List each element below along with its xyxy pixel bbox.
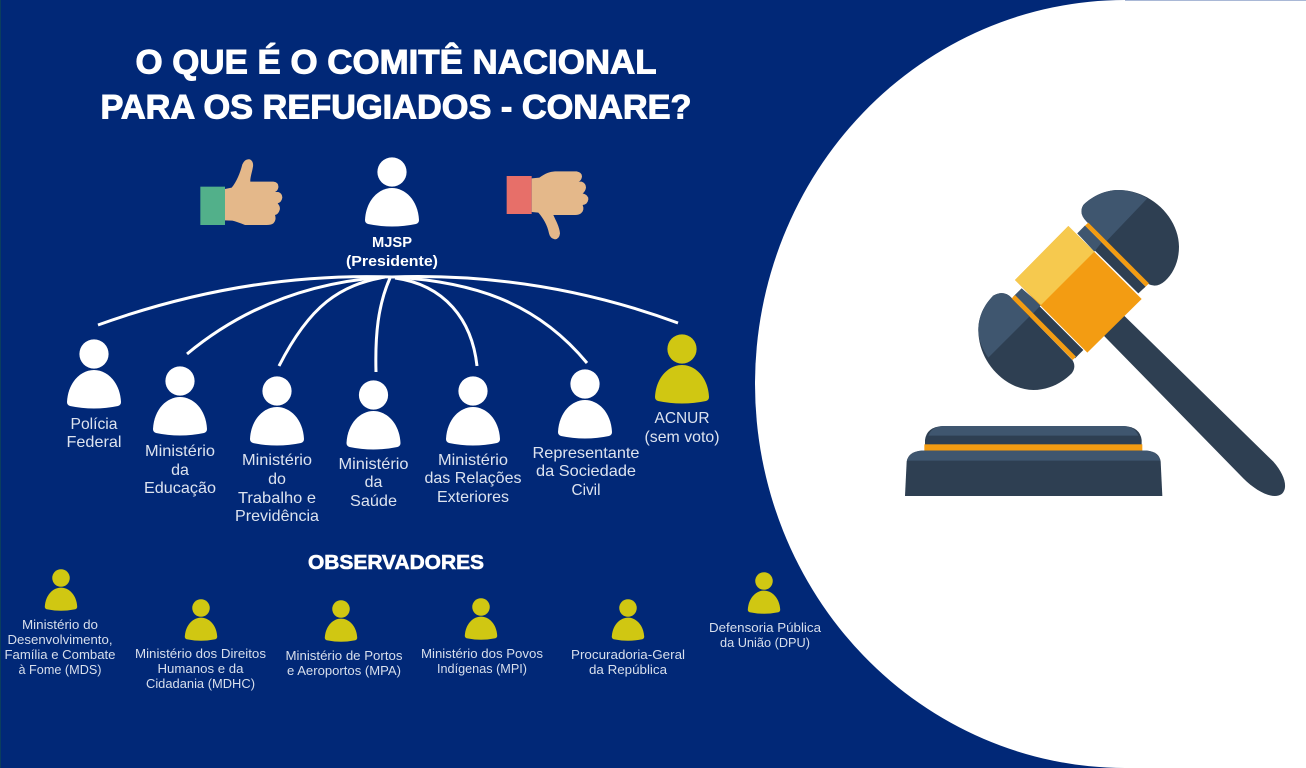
- member: Polícia Federal: Federal: [66, 434, 122, 451]
- white curved panel: [755, 0, 1306, 768]
- connector lines: [98, 277, 678, 372]
- title: [100, 44, 692, 126]
- member: Ministério da Educação: [144, 366, 216, 497]
- heading: observadores: OBSERVADORES: [308, 552, 484, 574]
- observer: MPI: [421, 598, 543, 676]
- member: Ministério do Trabalho e Previdência: [235, 376, 319, 525]
- member: Representante da Sociedade Civil: da Sociedade: [536, 463, 636, 480]
- president: MJSP: MJSP: [372, 234, 412, 251]
- member: Ministério do Trabalho e Previdência: Trabalho e: [238, 490, 316, 507]
- president: MJSP: (Presidente): [346, 253, 438, 270]
- member: Ministério da Saúde: da: [365, 474, 382, 491]
- observer: MDHC: Ministério dos Direitos: [135, 646, 267, 661]
- member: Ministério das Relações Exteriores: Exteriores: [437, 489, 509, 506]
- member: Representante da Sociedade Civil: Civil: [572, 482, 600, 499]
- observer: MDS: Família e Combate: [4, 647, 116, 662]
- observer: MPA: [286, 600, 403, 678]
- title: O QUE É O COMITÊ NACIONAL: [136, 44, 656, 82]
- icon: thumbs down: [507, 171, 588, 239]
- observer: MDS: [4, 569, 116, 677]
- member: Ministério da Educação: da: [171, 462, 189, 479]
- member: ACNUR: (sem voto): [644, 429, 720, 446]
- observer: MDHC: [135, 599, 267, 691]
- observer: MDHC: Cidadania (MDHC): [146, 676, 255, 691]
- observer: MDHC: Humanos e da: [158, 661, 244, 676]
- member: Polícia Federal: Polícia: [70, 416, 118, 433]
- observer: DPU: [709, 572, 822, 650]
- member: Ministério das Relações Exteriores: das Relações: [424, 470, 522, 487]
- icon: thumbs up: [200, 159, 282, 225]
- observer: MPA: e Aeroportos (MPA): [287, 663, 401, 678]
- observer: MDS: Ministério do: [22, 617, 98, 632]
- title: PARA OS REFUGIADOS - CONARE?: [100, 88, 692, 126]
- member: Ministério da Saúde: [338, 380, 409, 510]
- member: Representante da Sociedade Civil: Representante: [532, 445, 640, 462]
- observer: MDS: à Fome (MDS): [18, 662, 102, 677]
- observer: PGR: [571, 599, 685, 677]
- observer: DPU: da União (DPU): [720, 635, 810, 650]
- president: MJSP: [346, 157, 438, 270]
- observer: MDS: Desenvolvimento,: [8, 632, 112, 647]
- observer: DPU: Defensoria Pública: [709, 620, 822, 635]
- member: Polícia Federal: [66, 339, 122, 451]
- observer: MPA: Ministério de Portos: [286, 648, 403, 663]
- member: Ministério da Educação: Educação: [144, 480, 216, 497]
- member: ACNUR: ACNUR: [654, 410, 710, 427]
- member: Ministério da Saúde: Saúde: [350, 493, 397, 510]
- member: Ministério do Trabalho e Previdência: do: [268, 471, 286, 488]
- icon: gavel: [905, 190, 1285, 496]
- member: Ministério do Trabalho e Previdência: Ministério: [242, 452, 312, 469]
- member: Ministério do Trabalho e Previdência: Previdência: [235, 508, 319, 525]
- observer: MPI: Ministério dos Povos: [421, 646, 543, 661]
- observer: PGR: da República: [589, 662, 668, 677]
- observer: MPI: Indígenas (MPI): [437, 661, 527, 676]
- member: Ministério das Relações Exteriores: Ministério: [438, 452, 508, 469]
- member: Ministério da Educação: Ministério: [145, 443, 215, 460]
- member: Representante da Sociedade Civil: [532, 369, 640, 499]
- member: ACNUR: [644, 334, 720, 446]
- member: Ministério da Saúde: Ministério: [338, 456, 409, 473]
- observer: PGR: Procuradoria-Geral: [571, 647, 685, 662]
- member: Ministério das Relações Exteriores: [424, 376, 522, 506]
